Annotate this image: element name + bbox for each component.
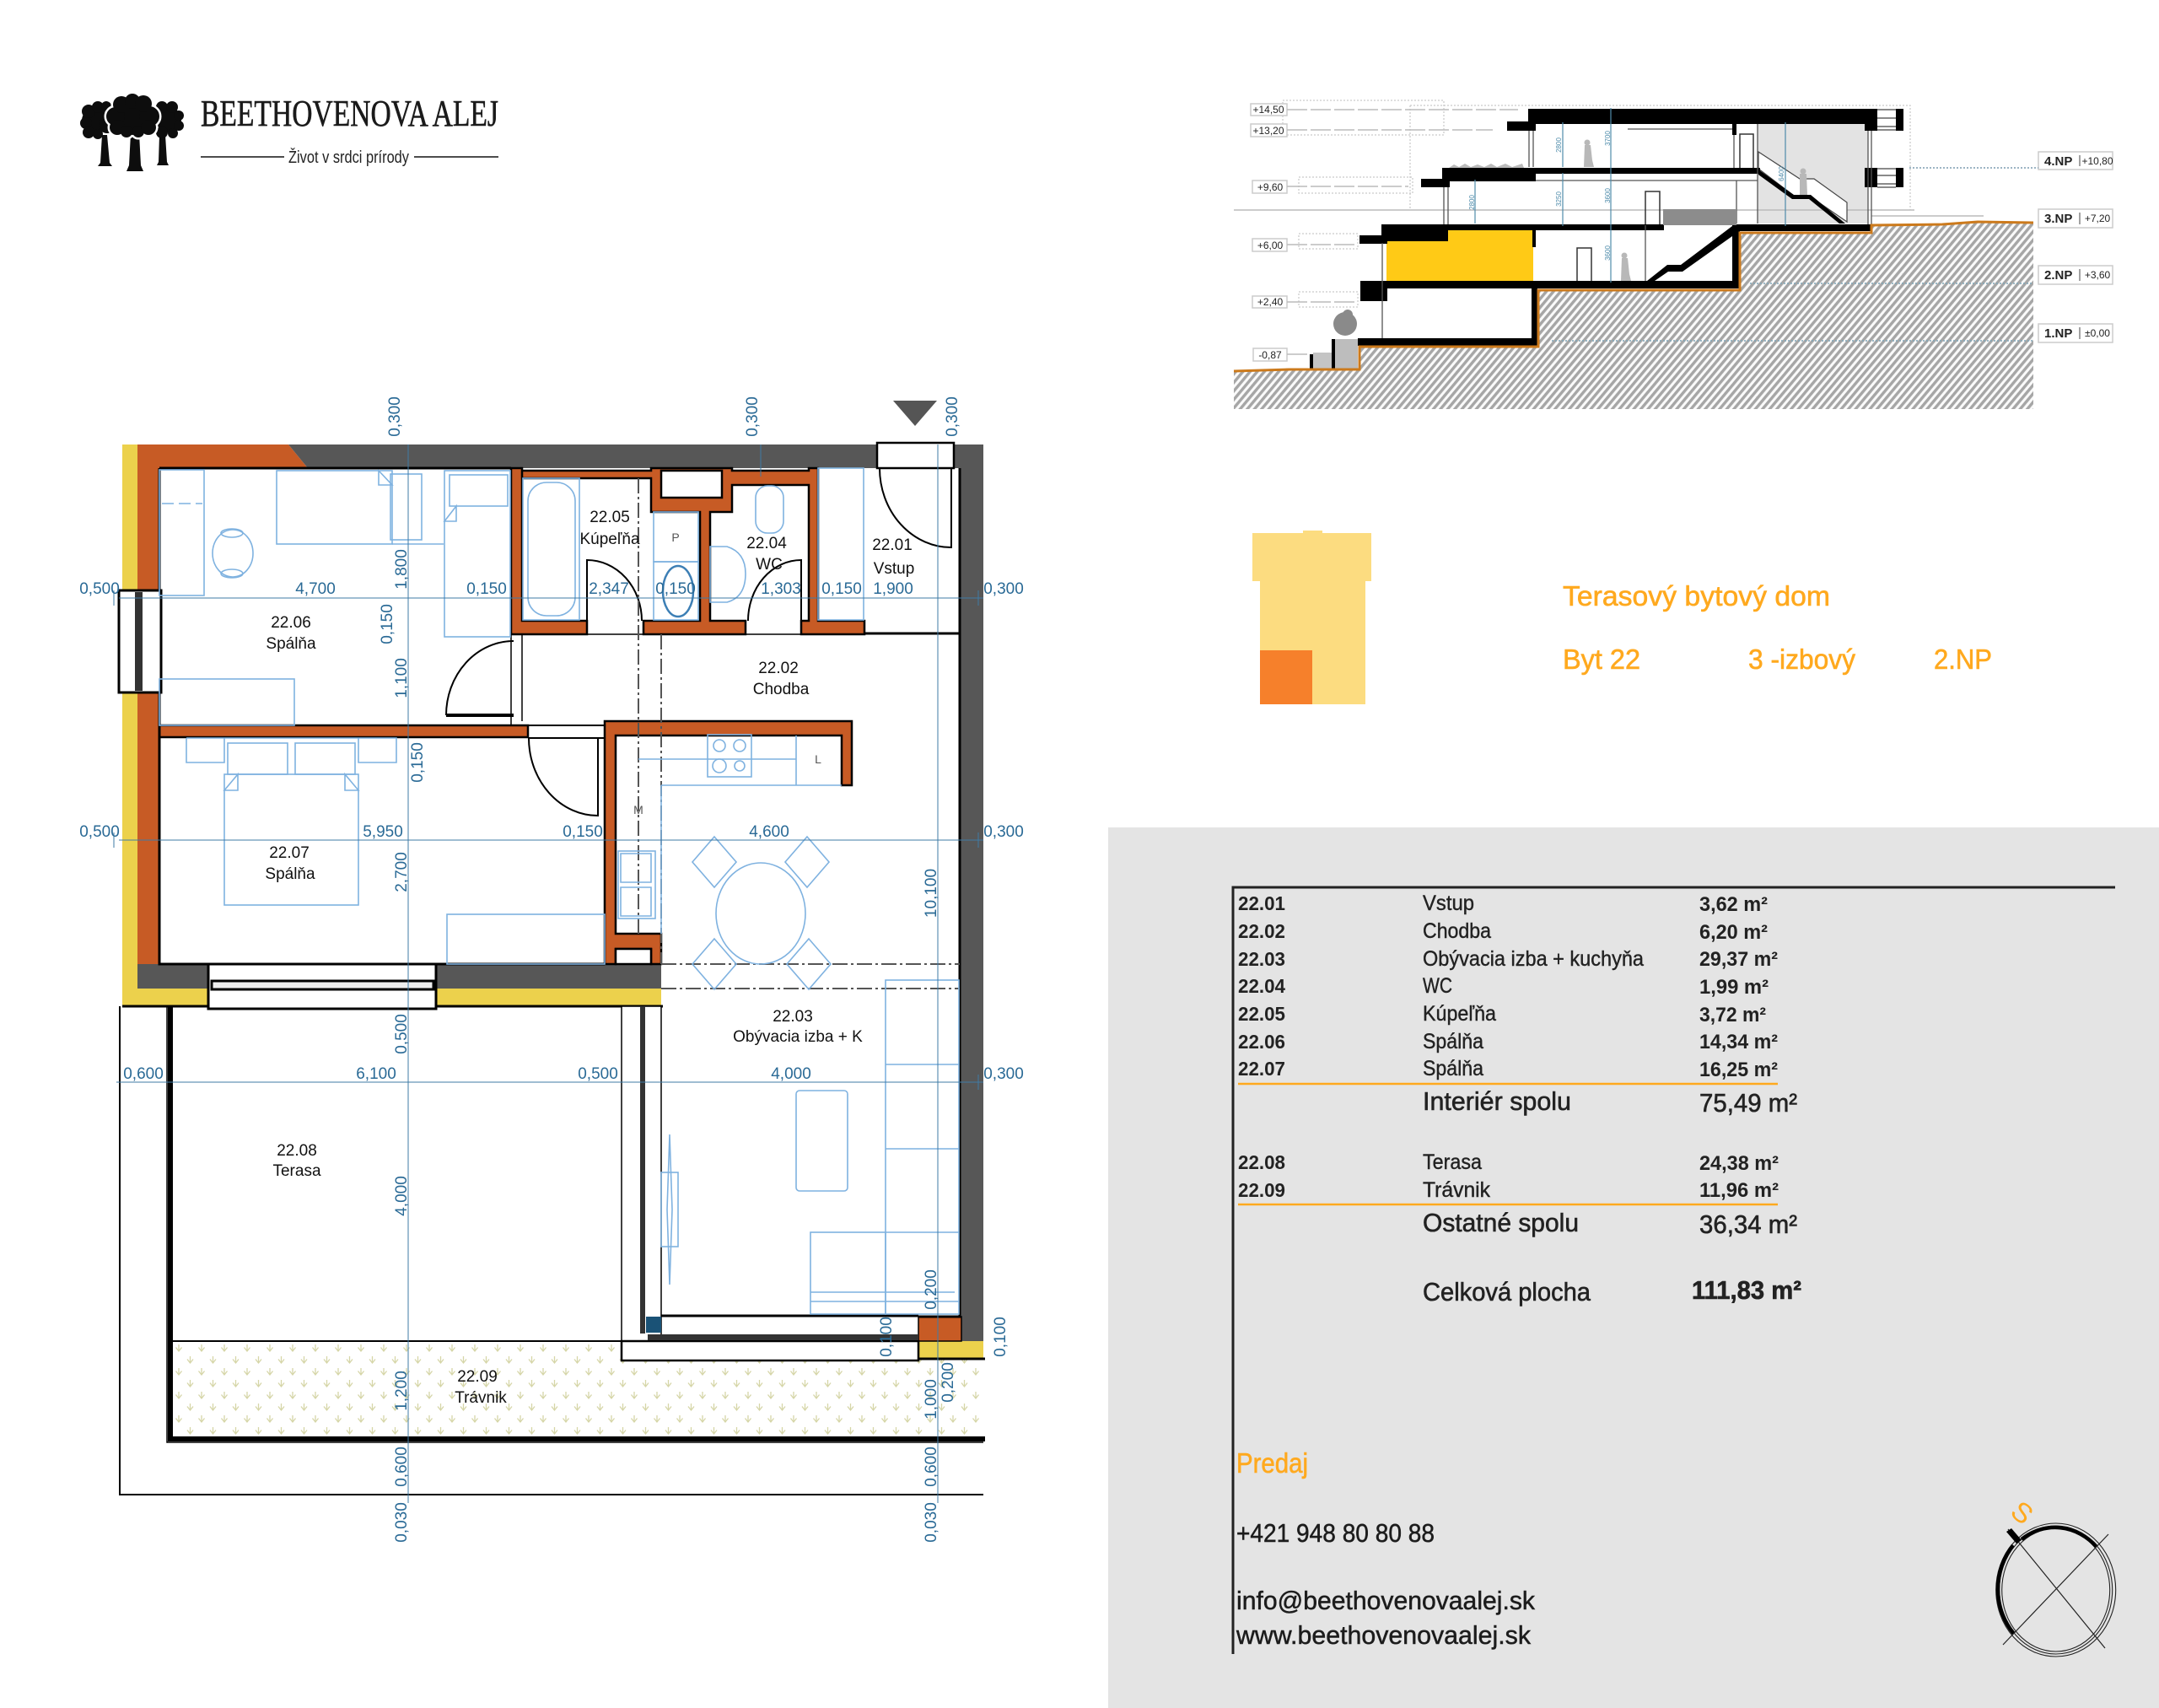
- dimension labels: 1,303: [761, 580, 801, 598]
- room areas: 1,99 m²: [1699, 976, 1769, 999]
- dimension labels: 0,150: [655, 580, 696, 598]
- section dimension lines: [1468, 108, 1785, 283]
- entrance marker: [893, 401, 937, 426]
- sales contact: info@beethovenovaalej.sk: [1236, 1586, 1535, 1615]
- room labels: Terasa: [272, 1162, 321, 1180]
- dimension lines: [114, 445, 983, 1503]
- terrace outlines: [120, 1006, 985, 1495]
- dimension labels: 0,600: [393, 1447, 411, 1487]
- dimension labels: 0,100: [992, 1317, 1010, 1357]
- room areas: 6,20 m²: [1699, 921, 1768, 944]
- room codes: 22.01: [1238, 892, 1285, 914]
- level marks right: [1552, 152, 2113, 342]
- sales contact: +421 948 80 80 88: [1236, 1518, 1435, 1548]
- room names: Terasa: [1423, 1150, 1482, 1174]
- section ground hatch: [1234, 222, 2033, 409]
- room codes: 22.07: [1238, 1058, 1285, 1080]
- dimension labels: 0,200: [940, 1362, 957, 1403]
- room areas: [1699, 893, 1779, 1202]
- level marks left: +6,00: [1257, 240, 1284, 251]
- interior total: 75,49 m²: [1699, 1088, 1797, 1118]
- highlighted apartment: [1386, 230, 1533, 281]
- sales contact: Predaj: [1236, 1447, 1308, 1479]
- room areas: 24,38 m²: [1699, 1152, 1779, 1175]
- section dimension lines: 3600: [1604, 245, 1612, 261]
- dimension labels: 1,000: [923, 1379, 940, 1420]
- total area: 111,83 m²: [1692, 1275, 1801, 1305]
- room names: Trávnik: [1423, 1178, 1490, 1202]
- room names: WC: [1423, 974, 1452, 998]
- subheading: apartment info: [1563, 644, 1992, 675]
- room labels: Trávnik: [455, 1389, 507, 1407]
- heading: building type: Terasový bytový dom: [1563, 580, 1830, 612]
- logo wordmark: BEETHOVENOVA ALEJ: [201, 93, 498, 134]
- dimension labels: 0,500: [79, 823, 120, 841]
- total area: [1423, 1275, 1801, 1307]
- level marks right: +3,60: [2085, 269, 2111, 281]
- room labels: 22.04: [746, 535, 787, 552]
- room areas: 14,34 m²: [1699, 1031, 1778, 1053]
- room labels: 22.06: [271, 614, 311, 632]
- windows: [119, 590, 918, 1360]
- room names: Obývacia izba + kuchyňa: [1423, 947, 1644, 971]
- dimension labels: 4,600: [749, 823, 789, 841]
- interior total: Interiér spolu: [1423, 1086, 1571, 1116]
- level marks right: ±0,00: [2085, 327, 2110, 339]
- building section: [1234, 100, 2113, 409]
- room labels: 22.01: [872, 536, 913, 554]
- level marks left: +9,60: [1257, 181, 1284, 193]
- dimension labels: 0,300: [983, 580, 1024, 598]
- room labels: Chodba: [753, 681, 810, 698]
- dimension labels: 4,700: [295, 580, 336, 598]
- doors: [446, 443, 954, 816]
- dimension labels: 0,100: [878, 1317, 896, 1357]
- dimension labels: 0,150: [466, 580, 507, 598]
- dimension labels: 0,300: [744, 396, 762, 437]
- section interior lines: [1382, 124, 1871, 338]
- ghost reference frame: [1283, 100, 1910, 307]
- room codes: 22.06: [1238, 1031, 1285, 1053]
- dimension labels: 0,300: [983, 823, 1024, 841]
- room labels: M: [633, 803, 643, 816]
- key plan icon: [1252, 531, 1371, 704]
- floor plan: [79, 396, 1024, 1543]
- room areas: 16,25 m²: [1699, 1059, 1778, 1081]
- furniture: [159, 468, 959, 1314]
- room codes: 22.05: [1238, 1003, 1285, 1025]
- level marks right: +7,20: [2085, 213, 2111, 224]
- subheading: apartment info: 2.NP: [1934, 644, 1992, 675]
- exterior walls: [122, 445, 985, 1359]
- room areas: 3,72 m²: [1699, 1004, 1766, 1026]
- section dimension lines: 3600: [1604, 188, 1612, 203]
- room areas: 29,37 m²: [1699, 948, 1778, 971]
- section dimension lines: 2800: [1555, 137, 1563, 153]
- room codes: 22.02: [1238, 920, 1285, 942]
- dimension labels: 0,150: [563, 823, 603, 841]
- level marks left: +13,20: [1252, 125, 1284, 137]
- level marks right: 2.NP: [2044, 268, 2072, 283]
- stair core background: [1758, 124, 1868, 224]
- room labels: Obývacia izba + K: [733, 1028, 863, 1046]
- level marks left: +2,40: [1257, 296, 1284, 308]
- dimension labels: 1,200: [393, 1371, 411, 1411]
- structure: [1358, 109, 1903, 346]
- dimension labels: 2,347: [589, 580, 629, 598]
- room codes: 22.09: [1238, 1179, 1285, 1201]
- other total: 36,34 m²: [1699, 1210, 1797, 1239]
- total area: Celková plocha: [1423, 1277, 1591, 1307]
- dimension labels: 0,300: [944, 396, 961, 437]
- orange ground line: [1234, 222, 2033, 371]
- other total: Ostatné spolu: [1423, 1208, 1579, 1237]
- room labels: Vstup: [874, 560, 914, 578]
- room labels: WC: [756, 556, 783, 574]
- dimension labels: 0,030: [923, 1502, 940, 1543]
- level marks left: +14,50: [1252, 104, 1284, 116]
- dimension labels: 0,600: [923, 1447, 940, 1487]
- room labels: Spálňa: [266, 635, 316, 653]
- room names: Spálňa: [1423, 1030, 1483, 1053]
- table frame: [1233, 887, 2115, 1654]
- room names: Spálňa: [1423, 1057, 1483, 1080]
- room names: Kúpeľňa: [1423, 1002, 1496, 1026]
- floor reference line: [1234, 210, 1984, 216]
- icon: three trees: [80, 94, 184, 171]
- dimension labels: 0,500: [79, 580, 120, 598]
- dimension labels: 1,800: [393, 549, 411, 590]
- room areas: 3,62 m²: [1699, 893, 1768, 916]
- dimension labels: 0,500: [393, 1014, 411, 1054]
- shrub and retaining wall: [1311, 310, 1358, 369]
- dimension labels: 4,000: [393, 1176, 411, 1216]
- panel: area table: [1108, 827, 2159, 1708]
- room labels: [265, 509, 914, 1407]
- room labels: 22.02: [758, 660, 799, 677]
- room labels: 22.09: [457, 1368, 498, 1386]
- logo: [80, 93, 498, 171]
- icon: north compass: [1996, 1495, 2116, 1657]
- dimension labels: 0,600: [123, 1065, 164, 1083]
- room outlines: [159, 468, 960, 1317]
- room labels: 22.05: [590, 509, 630, 526]
- room labels: 22.03: [773, 1008, 813, 1026]
- room labels: L: [815, 752, 821, 766]
- dimension labels: 5,950: [363, 823, 403, 841]
- room codes: 22.08: [1238, 1151, 1285, 1173]
- interior walls: [159, 468, 864, 964]
- section dimension lines: 3700: [1604, 131, 1612, 146]
- totals separators: [1238, 1084, 1778, 1204]
- dimension labels: 0,030: [393, 1502, 411, 1543]
- dimension labels: 4,000: [771, 1065, 811, 1083]
- room codes: 22.03: [1238, 948, 1285, 970]
- centre lines: [638, 478, 960, 989]
- lawn 22.09: [173, 1343, 983, 1436]
- section stair wall stripes: [1663, 209, 1736, 225]
- subheading: apartment info: Byt 22: [1563, 644, 1640, 675]
- people silhouettes: [1584, 140, 1807, 281]
- room labels: 22.08: [277, 1142, 317, 1160]
- dimension labels: 0,300: [386, 396, 404, 437]
- sales contact: [1236, 1447, 1535, 1650]
- room names: Chodba: [1423, 919, 1491, 943]
- interior total: [1423, 1086, 1797, 1118]
- room areas: 11,96 m²: [1699, 1179, 1779, 1202]
- room labels: 22.07: [269, 844, 310, 862]
- room names: Vstup: [1423, 892, 1474, 915]
- room names: [1423, 892, 1644, 1202]
- logo tagline: Život v srdci prírody: [288, 148, 409, 167]
- section dimension lines: 2800: [1468, 195, 1476, 210]
- dimension labels: 10,100: [923, 869, 940, 918]
- subheading: apartment info: 3 -izbový: [1748, 644, 1855, 675]
- level marks left: -0,87: [1258, 349, 1282, 361]
- room labels: P: [671, 531, 680, 544]
- room codes: [1238, 892, 1285, 1201]
- dimension labels: 0,150: [379, 604, 396, 644]
- stair rail: [1758, 152, 1847, 222]
- dimension labels: 0,200: [923, 1269, 940, 1310]
- other total: [1423, 1208, 1797, 1239]
- dimension labels: [79, 396, 1024, 1543]
- level marks right: 3.NP: [2044, 212, 2072, 226]
- dimension labels: 2,700: [393, 852, 411, 892]
- dimension labels: 0,150: [409, 742, 427, 783]
- panel background: [1108, 827, 2159, 1708]
- room labels: Kúpeľňa: [579, 531, 640, 548]
- level marks right: 1.NP: [2044, 326, 2072, 341]
- dimension labels: 0,150: [821, 580, 862, 598]
- section dimension lines: 3250: [1555, 191, 1563, 207]
- shaft openings: [616, 471, 722, 964]
- icon: north compass: S: [2006, 1495, 2039, 1531]
- dimension labels: 6,100: [356, 1065, 396, 1083]
- dimension labels: 0,300: [983, 1065, 1024, 1083]
- room labels: Spálňa: [265, 865, 315, 883]
- sales contact: www.beethovenovaalej.sk: [1236, 1620, 1531, 1650]
- level marks right: 4.NP: [2044, 154, 2072, 169]
- section railings: [1877, 110, 1896, 187]
- dimension labels: 1,100: [393, 658, 411, 698]
- level marks right: +10,80: [2081, 155, 2113, 167]
- terrace planting: [1449, 164, 1524, 168]
- dimension labels: 1,900: [873, 580, 913, 598]
- level marks left: [1251, 104, 1518, 361]
- room codes: 22.04: [1238, 975, 1285, 997]
- dimension labels: 0,500: [578, 1065, 618, 1083]
- section dimension lines: 6400: [1778, 166, 1785, 181]
